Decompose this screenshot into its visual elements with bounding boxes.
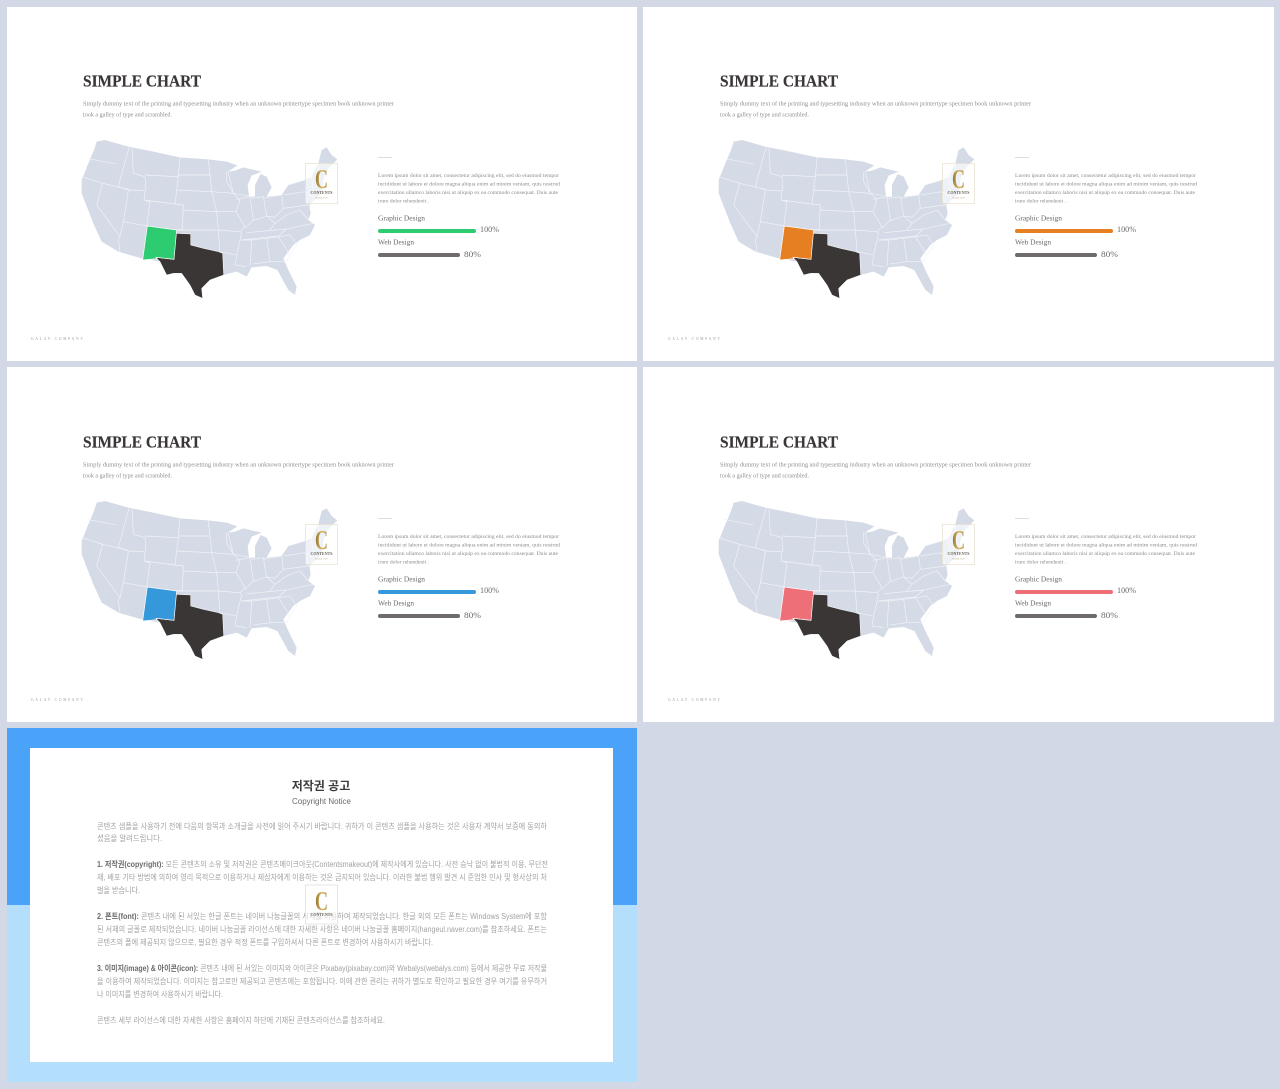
text block: exercitation ullamco laboris nisi ut aliquip ex ea commodo consequat. Duis aute: [1015, 551, 1196, 557]
subtitle text: took a galley of type and scrambled.: [83, 112, 172, 118]
logo watermark: CONTENTS: [948, 190, 970, 195]
footer: GALAY COMPANY: [31, 698, 84, 702]
paragraph 3 images: 3. 이미지(image) & 아이콘(icon): 콘텐츠 내에 된 서있는 이미지와 아이콘은 Pixabay(pixabay.com)와 Webalys(webalys.com) 등에서 제공한 무료 저작물: [97, 963, 547, 973]
logo watermark: MAKE OUT: [952, 558, 965, 560]
progress bars: Graphic Design: [1015, 214, 1062, 222]
text block: incididunt ut labore et dolore magna aliqua enim ad minim veniam, quis nostrud: [1015, 542, 1197, 548]
progress bars: [1015, 574, 1136, 620]
paragraph 2 font: 2. 폰트(font): 콘텐츠 내에 된 서있는 한글 폰트는 네이버 나눔글꼴의 서체를 이용하여 제작되었습니다. 한글 외의 모든 폰트는 Windows System에 포함: [97, 911, 548, 921]
panel: slide 2 orange: [643, 7, 1274, 361]
text block: Lorem ipsum dolor sit amet, consectetur adipiscing elit, sed do eiusmod tempor: [378, 534, 559, 540]
text block: [378, 157, 560, 204]
progress bars: 100%: [1117, 586, 1136, 595]
text block: [378, 518, 560, 566]
progress bars: [1015, 214, 1136, 259]
text block: incididunt ut labore et dolore magna aliqua enim ad minim veniam, quis nostrud: [378, 542, 560, 548]
text block: exercitation ullamco laboris nisi ut aliquip ex ea commodo consequat. Duis aute: [1015, 190, 1196, 196]
progress bars: Web Design: [1015, 598, 1051, 608]
intro paragraph: [97, 821, 548, 843]
text block: [1015, 157, 1197, 204]
footer: GALAY COMPANY: [668, 337, 721, 341]
text block: exercitation ullamco laboris nisi ut aliquip ex ea commodo consequat. Duis aute: [378, 551, 559, 557]
panel: slide 1 green: [7, 7, 637, 361]
intro paragraph: 셨음을 알려드립니다.: [97, 833, 162, 843]
progress bars: 80%: [464, 611, 481, 620]
subtitle text: Simply dummy text of the printing and typesetting industry when an unknown printertype specimen book unknown printer: [83, 100, 394, 108]
closing note: 콘텐츠 세부 라이선스에 대한 자세한 사항은 홈페이지 하단에 기재된 콘텐츠라이선스를 참조하세요.: [97, 1015, 385, 1025]
subtitle text: [83, 100, 394, 118]
progress bars: [378, 214, 499, 259]
logo watermark: C: [315, 886, 328, 916]
progress bars: 100%: [480, 586, 499, 595]
title: SIMPLE CHART: [83, 432, 202, 452]
US map with New Mexico highlighted: [719, 140, 974, 298]
subtitle text: Simply dummy text of the printing and typesetting industry when an unknown printertype specimen book unknown printer: [720, 100, 1031, 108]
logo watermark: [942, 524, 974, 564]
text block: Lorem ipsum dolor sit amet, consectetur adipiscing elit, sed do eiusmod tempor: [1015, 173, 1196, 179]
text block: [1015, 518, 1197, 566]
footer: GALAY COMPANY: [31, 337, 84, 341]
logo watermark: [306, 885, 338, 924]
logo watermark: MAKE OUT: [952, 196, 965, 200]
logo watermark: C: [952, 164, 965, 194]
notice heading: 저작권 공고: [292, 778, 350, 793]
title: SIMPLE CHART: [720, 72, 839, 90]
progress bars: 80%: [1101, 611, 1118, 620]
panel: copyright notice: [7, 728, 637, 1082]
footer: GALAY COMPANY: [668, 698, 721, 702]
paragraph 3 images: [97, 963, 547, 999]
logo watermark: [306, 524, 338, 564]
paragraph 1 copyright: 재, 배포 기타 방법에 의하여 영리 목적으로 이용하거나 제삼자에게 이용하는 것은 금지되어 있습니다. 이러한 불법 행위 발견 시 준엄한 민사 및 형사상의 처: [97, 872, 547, 882]
progress bars: 80%: [1101, 250, 1118, 259]
panel: slide 3 blue: [7, 367, 637, 722]
progress bars: Graphic Design: [378, 574, 425, 584]
text block: irure dolor rehendenit .: [1015, 560, 1066, 566]
logo watermark: CONTENTS: [948, 551, 970, 556]
logo watermark: MAKE OUT: [315, 196, 328, 200]
subtitle text: Simply dummy text of the printing and typesetting industry when an unknown printertype specimen book unknown printer: [720, 462, 1031, 468]
progress bars: Web Design: [378, 598, 414, 608]
progress bars: Graphic Design: [378, 214, 425, 222]
subtitle text: took a galley of type and scrambled.: [720, 112, 809, 118]
progress bars: [378, 574, 499, 620]
subtitle text: [720, 100, 1031, 118]
logo watermark: C: [315, 164, 328, 194]
paragraph 3 images: 나 이미지를 변경하여 사용하시기 바랍니다.: [97, 989, 223, 999]
notice subheading: Copyright Notice: [292, 796, 351, 806]
logo watermark: MAKE OUT: [315, 558, 328, 560]
text block: irure dolor rehendenit .: [378, 198, 429, 204]
subtitle text: [720, 462, 1031, 480]
progress bars: Graphic Design: [1015, 574, 1062, 584]
logo watermark: CONTENTS: [310, 912, 333, 917]
subtitle text: took a galley of type and scrambled.: [83, 472, 172, 480]
logo watermark: [306, 164, 338, 204]
paragraph 2 font: 콘텐츠의 폴에 제공되지 않으므로, 필요한 경우 적정 폰트를 구입하셔서 다른 폰트로 변경하여 사용하시기 바랍니다.: [97, 937, 433, 947]
text block: Lorem ipsum dolor sit amet, consectetur adipiscing elit, sed do eiusmod tempor: [1015, 534, 1196, 540]
progress bars: 80%: [464, 250, 481, 259]
text block: Lorem ipsum dolor sit amet, consectetur adipiscing elit, sed do eiusmod tempor: [378, 173, 559, 179]
text block: incididunt ut labore et dolore magna aliqua enim ad minim veniam, quis nostrud: [1015, 182, 1197, 188]
title: SIMPLE CHART: [83, 72, 202, 90]
subtitle text: Simply dummy text of the printing and typesetting industry when an unknown printertype specimen book unknown printer: [83, 462, 394, 468]
text block: irure dolor rehendenit .: [1015, 198, 1066, 204]
US map with New Mexico highlighted: [719, 501, 974, 659]
subtitle text: [83, 462, 394, 480]
logo watermark: C: [952, 525, 965, 555]
progress bars: Web Design: [1015, 238, 1051, 246]
subtitle text: took a galley of type and scrambled.: [720, 472, 809, 480]
logo watermark: C: [315, 525, 328, 555]
progress bars: Web Design: [378, 238, 414, 246]
text block: incididunt ut labore et dolore magna aliqua enim ad minim veniam, quis nostrud: [378, 182, 560, 188]
title: SIMPLE CHART: [720, 432, 839, 452]
progress bars: 100%: [480, 225, 499, 234]
logo watermark: CONTENTS: [310, 190, 333, 195]
logo watermark: [942, 164, 974, 204]
US map with New Mexico highlighted: [82, 140, 337, 298]
text block: exercitation ullamco laboris nisi ut aliquip ex ea commodo consequat. Duis aute: [378, 190, 559, 196]
panel: slide 4 red: [643, 367, 1274, 722]
progress bars: 100%: [1117, 225, 1136, 234]
paragraph 1 copyright: 벌을 받습니다.: [97, 885, 140, 895]
paragraph 3 images: 을 이용하여 제작되었습니다. 이미지는 참고로만 제공되고 콘텐츠에는 포함됩니다. 이에 관한 권리는 귀하가 별도로 확인하고 필요한 경우 여기를 유무하거: [97, 976, 547, 986]
text block: irure dolor rehendenit .: [378, 560, 429, 566]
logo watermark: CONTENTS: [310, 551, 333, 556]
paragraph 1 copyright: 1. 저작권(copyright): 모든 콘텐츠의 소유 및 저작권은 콘텐츠메이크아웃(Contentsmakeout)에 제작사에게 있습니다. 사전 승낙 없이 불법적 이용, 무단전: [97, 859, 548, 869]
paragraph 2 font: 된 서체의 글꼴로 제작되었습니다. 네이버 나눔글꼴 라이선스에 대한 자세한 사항은 네이버 나눔글꼴 홈페이지(hangeul.naver.com)를 참조하세요. 폰트는: [97, 924, 547, 934]
intro paragraph: 콘텐츠 샘플을 사용하기 전에 다음의 항목과 소개글을 사전에 읽어 주시기 바랍니다. 귀하가 이 콘텐츠 샘플을 사용하는 것은 사용자 계약서 보증에 동의하: [97, 821, 548, 831]
paragraph 2 font: [97, 911, 548, 947]
US map with New Mexico highlighted: [82, 501, 337, 659]
paragraph 1 copyright: [97, 859, 548, 895]
